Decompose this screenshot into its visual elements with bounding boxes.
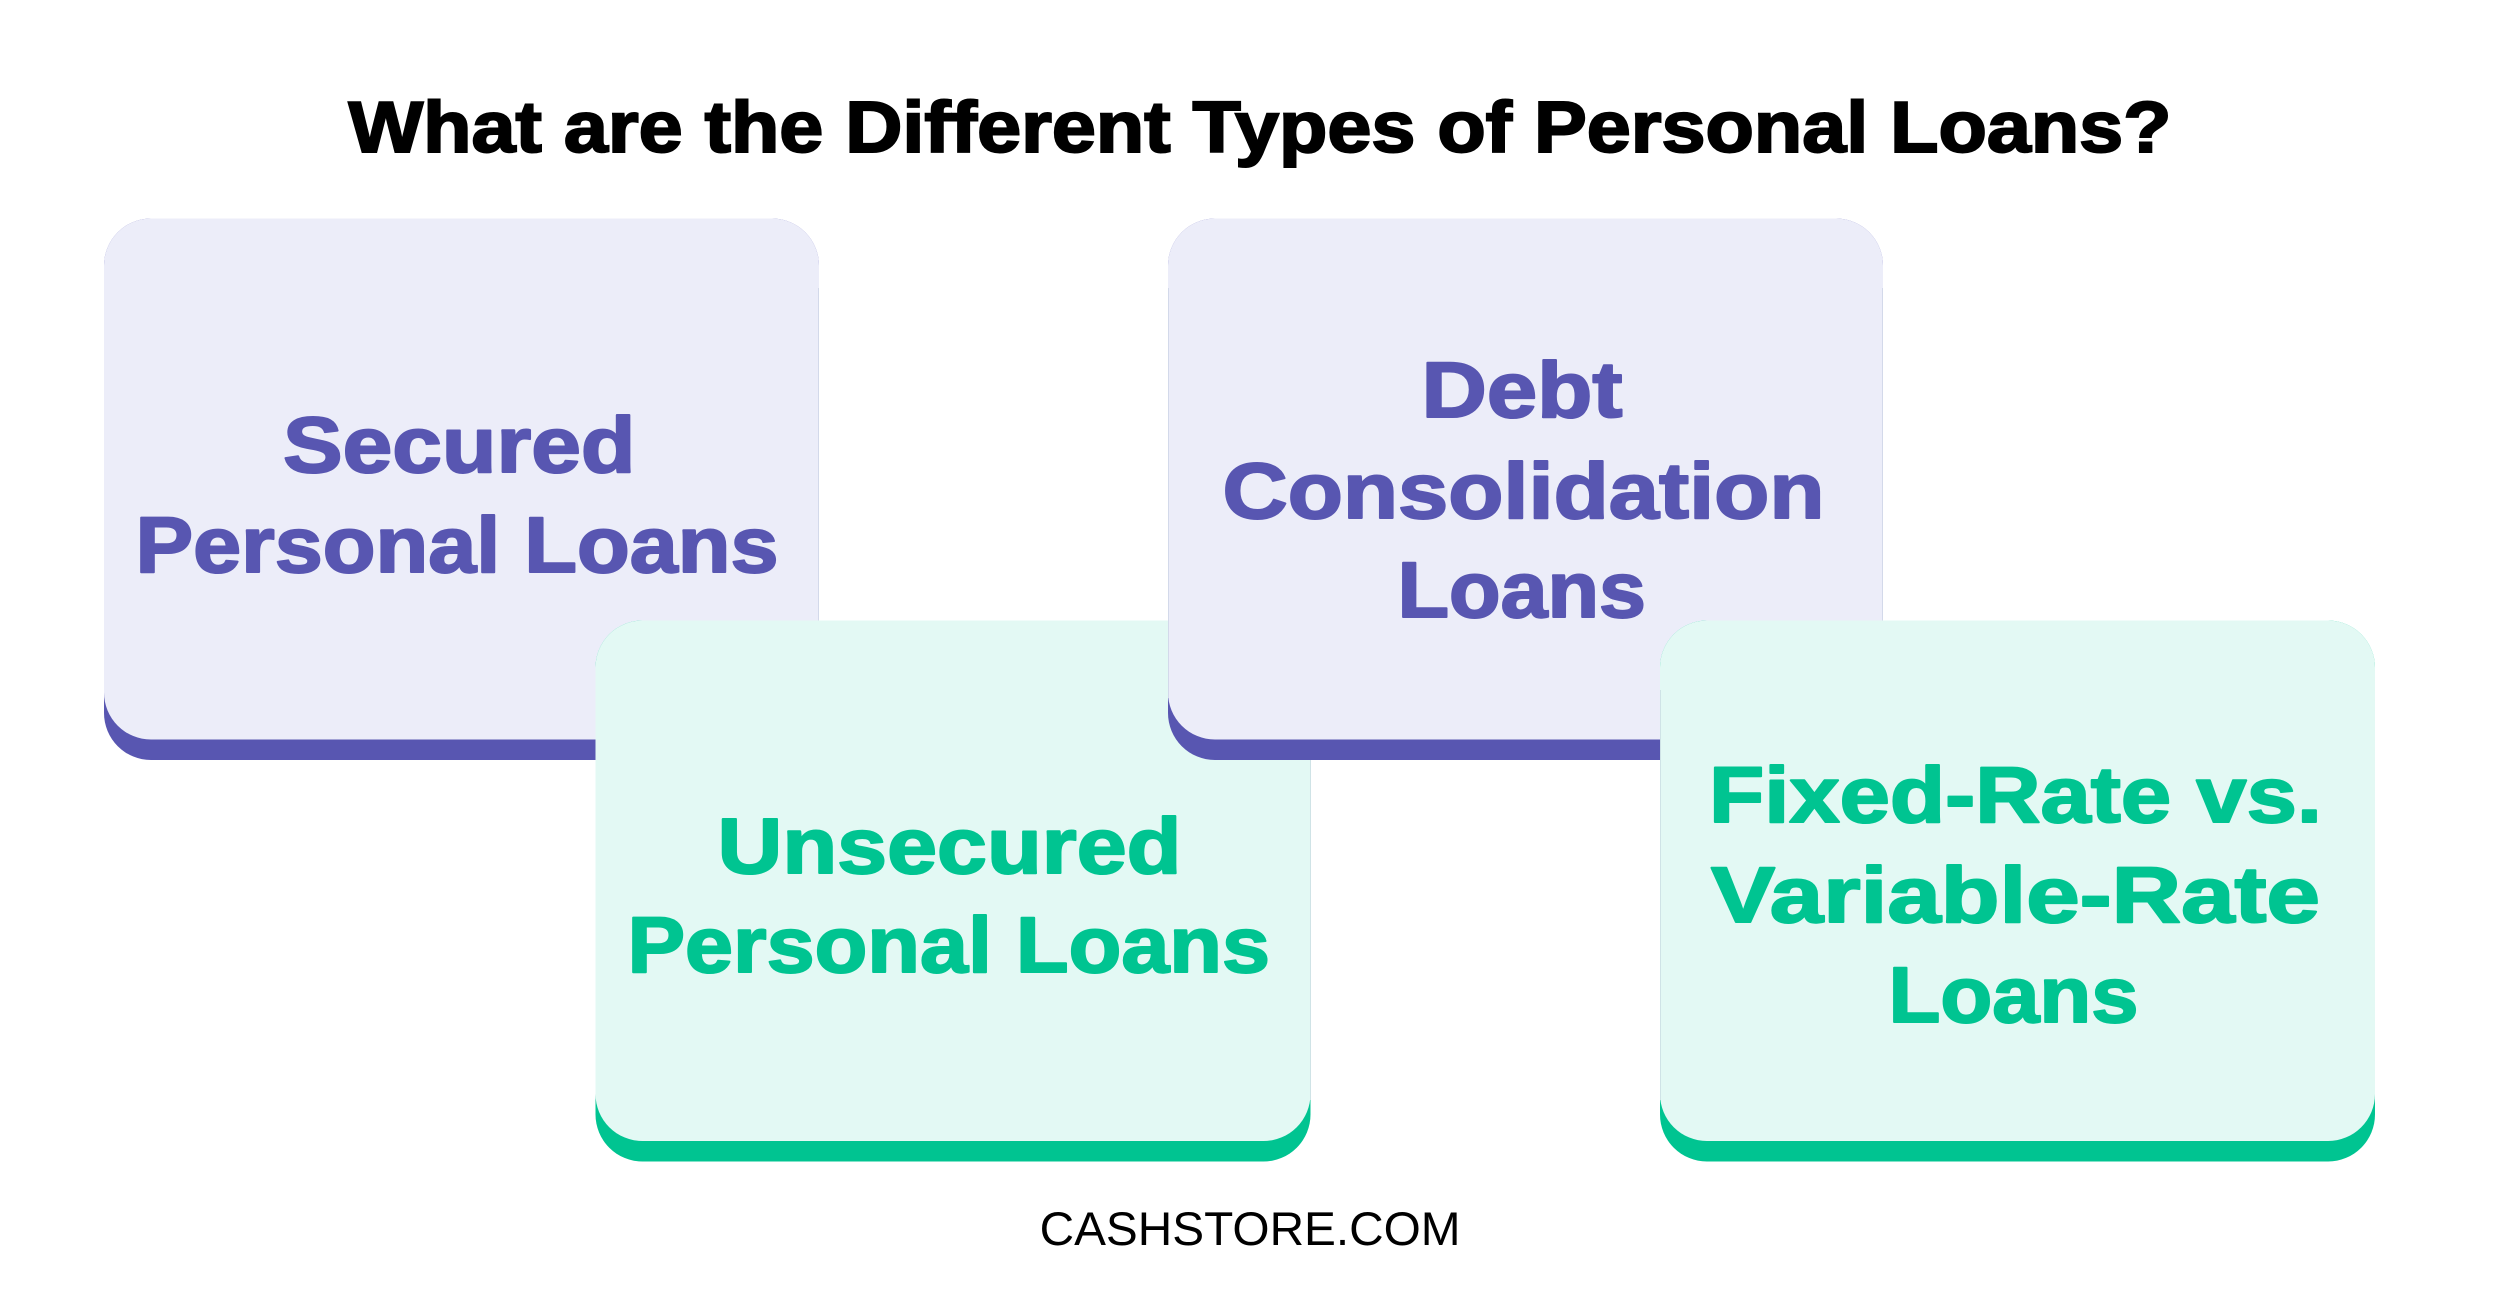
label: debt consolidation loans — [1222, 345, 1824, 634]
label: debt consolidation loans: Loans — [1398, 545, 1646, 634]
label: debt consolidation loans: Debt — [1422, 345, 1622, 434]
label: debt consolidation loans: Consolidation — [1222, 446, 1824, 535]
panel: secured personal loans — [104, 218, 819, 760]
label: unsecured personal loans — [628, 801, 1270, 989]
title: What are the Different Types of Personal Loans? — [348, 88, 2172, 168]
label: fixed-rate vs variable-rate loans: Fixed-Rate vs. — [1709, 750, 2322, 839]
label: fixed-rate vs variable-rate loans: Loans — [1888, 950, 2138, 1039]
label: unsecured personal loans: Unsecured — [718, 801, 1182, 890]
panel: debt consolidation loans — [1168, 218, 1883, 760]
footer: site name: CASHSTORE.COM — [1040, 1203, 1461, 1256]
label: secured personal loans — [136, 400, 779, 589]
label: secured personal loans: Secured — [283, 400, 636, 489]
label: fixed-rate vs variable-rate loans — [1709, 750, 2322, 1039]
label: fixed-rate vs variable-rate loans: Variable-Rate — [1711, 850, 2320, 939]
panel: fixed-rate vs variable-rate loans — [1660, 620, 2375, 1162]
panel: unsecured personal loans — [596, 620, 1311, 1162]
label: secured personal loans: Personal Loans — [136, 500, 779, 589]
label: unsecured personal loans: Personal Loans — [628, 900, 1270, 989]
